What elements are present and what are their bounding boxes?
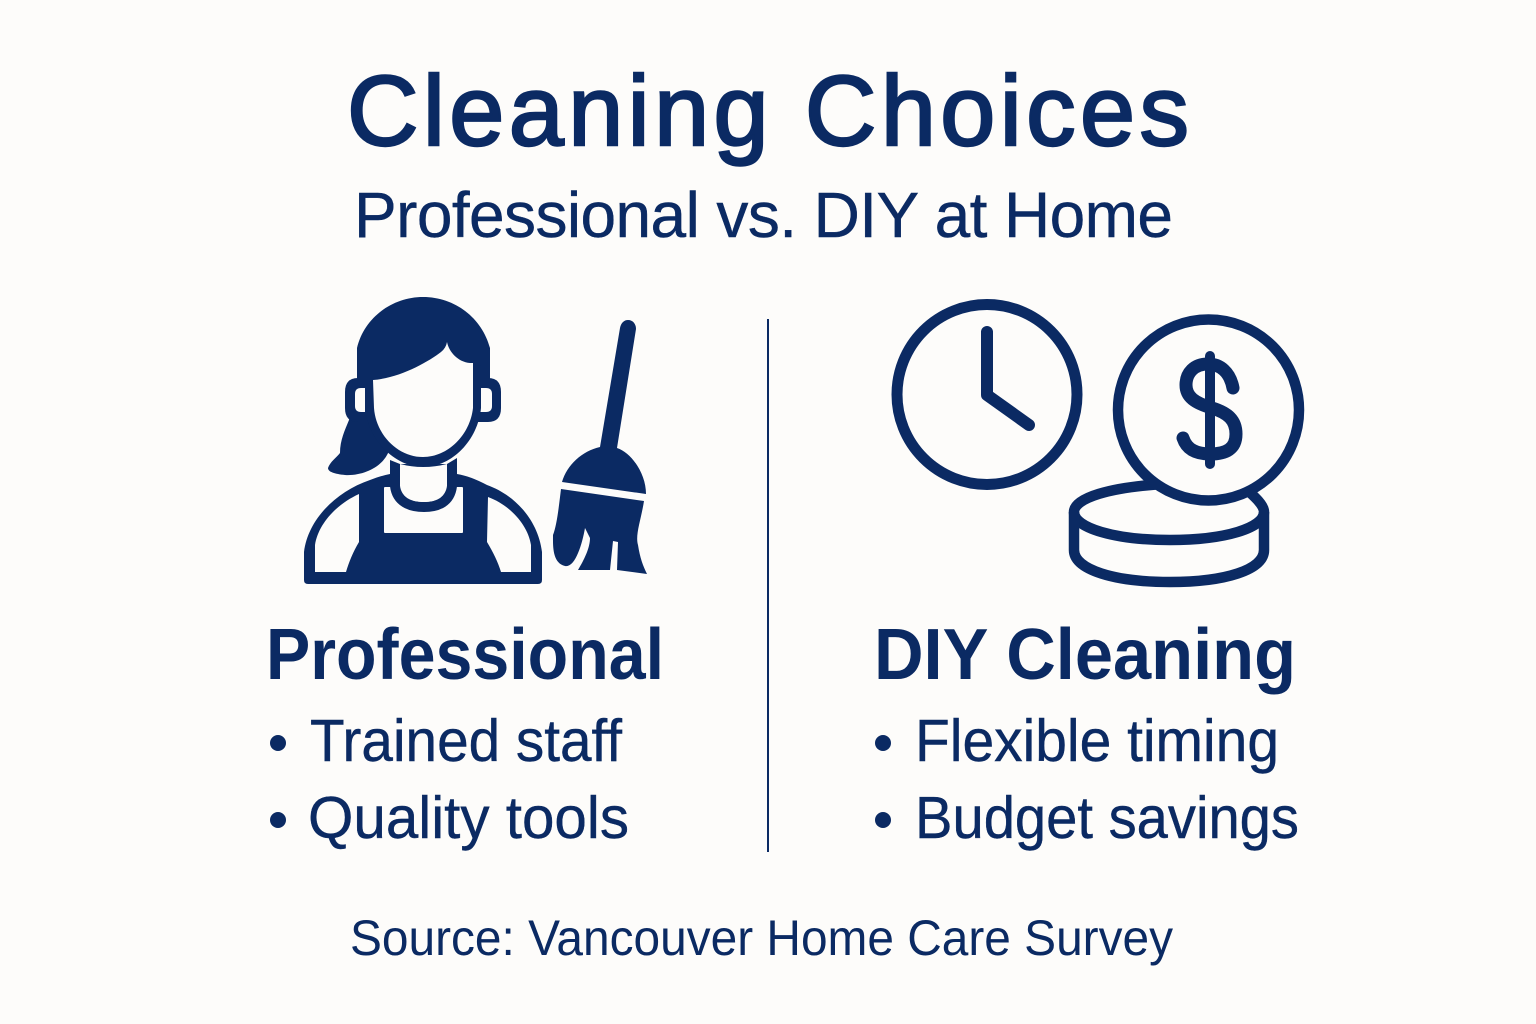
ear right inner bbox=[480, 388, 492, 412]
icon: cleaner with broom bbox=[304, 297, 647, 584]
arm right bbox=[487, 497, 531, 572]
chest bbox=[384, 487, 463, 533]
ear left inner bbox=[355, 388, 365, 412]
heading: professional: Professional bbox=[266, 615, 664, 695]
icon: clock bbox=[897, 304, 1077, 484]
icon: cleaner person bbox=[304, 297, 542, 584]
divider bbox=[767, 319, 769, 852]
bullet: budget savings: Budget savings bbox=[915, 785, 1299, 851]
face outline bbox=[365, 365, 481, 467]
collar bbox=[395, 480, 452, 507]
icon: dollar coin bbox=[1118, 320, 1299, 500]
bullet: trained staff: Trained staff bbox=[310, 708, 623, 774]
ear left bbox=[345, 378, 372, 422]
panel: diy cleaning bbox=[874, 615, 1299, 851]
hair and ponytail bbox=[328, 297, 490, 475]
body and apron bbox=[304, 458, 542, 584]
arm left bbox=[315, 494, 359, 572]
icon: broom bbox=[553, 320, 647, 574]
title: Cleaning Choices bbox=[347, 55, 1189, 166]
ear right bbox=[474, 378, 501, 422]
source note: Source: Vancouver Home Care Survey bbox=[350, 910, 1173, 966]
bullet: quality tools: Quality tools bbox=[308, 785, 629, 851]
panel: professional bbox=[266, 615, 664, 851]
icon: clock and coins bbox=[897, 304, 1299, 582]
subtitle: Professional vs. DIY at Home bbox=[354, 179, 1173, 251]
icon: coin stack bbox=[1074, 484, 1264, 582]
bullet: flexible timing: Flexible timing bbox=[915, 708, 1279, 774]
neck bbox=[400, 464, 447, 502]
heading: diy cleaning: DIY Cleaning bbox=[874, 615, 1296, 695]
face bbox=[373, 342, 473, 457]
